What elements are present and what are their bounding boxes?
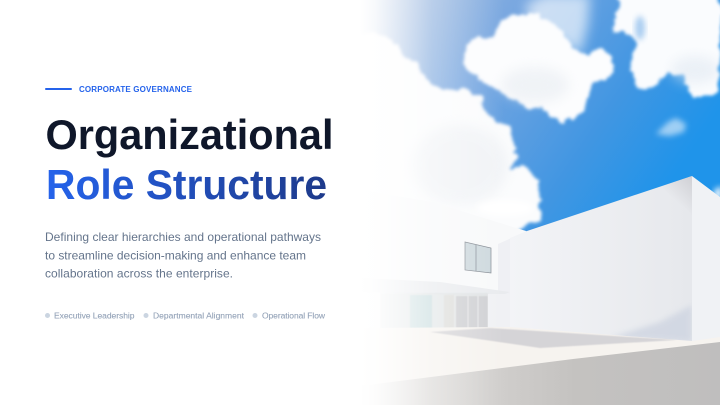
title line 1: Organizational (46, 111, 334, 158)
wall shadow (618, 307, 692, 340)
title (46, 111, 334, 208)
clouds (352, 0, 720, 240)
glass doors (407, 294, 488, 328)
tag: operational flow: Operational Flow (262, 310, 326, 320)
accent line (45, 88, 72, 90)
description: collaboration across the enterprise. (45, 266, 233, 280)
description: Defining clear hierarchies and operational pathways (45, 230, 321, 244)
sky (360, 0, 720, 240)
inner return wall (498, 231, 527, 294)
wall top shading (671, 176, 692, 202)
terrace shadow (430, 328, 677, 348)
tags (45, 310, 326, 320)
tag: departmental alignment: Departmental Alignment (153, 310, 245, 320)
lower wall beside doors (488, 294, 489, 296)
tag: executive leadership: Executive Leadership (54, 310, 135, 320)
image fade to white (360, 0, 492, 405)
eyebrow label: CORPORATE GOVERNANCE (79, 85, 193, 94)
right wall (510, 176, 692, 342)
description (45, 230, 321, 280)
terrace (410, 327, 720, 378)
canopy (422, 282, 498, 294)
title line 2: Role Structure (46, 161, 327, 208)
corner wall (692, 176, 720, 342)
photo: sky and white building (352, 0, 720, 405)
window (465, 242, 491, 273)
ground (402, 342, 720, 405)
left wall (378, 228, 526, 240)
description: to streamline decision-making and enhance team (45, 248, 306, 262)
